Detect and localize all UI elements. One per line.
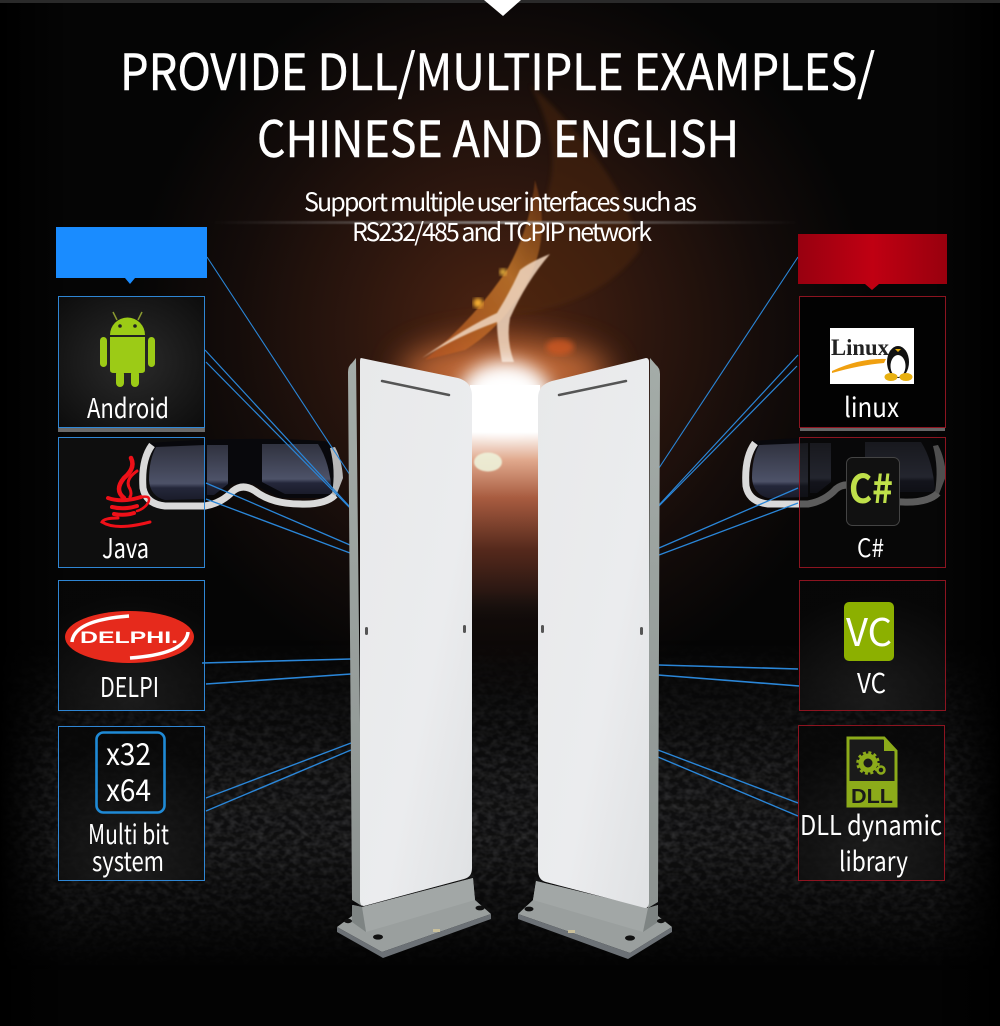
right gate <box>518 358 672 959</box>
icon: x32 x64 badge <box>96 730 164 812</box>
left gate indicators <box>365 625 466 635</box>
label: system <box>92 840 164 879</box>
label: Multi bit <box>88 813 169 852</box>
panel: DELPHI <box>58 580 204 710</box>
right gate slot <box>559 381 626 395</box>
label: C# <box>857 529 884 565</box>
panel: Android <box>58 296 204 428</box>
fire swoosh behind the gates <box>400 85 640 404</box>
icon: DLL file: DLL <box>851 786 893 808</box>
VR goggles right <box>746 437 946 504</box>
box backgrounds: left tiles <box>58 296 205 881</box>
left gate <box>337 358 491 958</box>
icon: C# tile: C# <box>849 457 893 515</box>
panel: Multi bit system <box>58 726 204 880</box>
subtitle <box>304 183 697 249</box>
panel: Java <box>58 438 204 568</box>
subtitle: Support multiple user interfaces such as <box>304 183 697 219</box>
title <box>120 33 875 172</box>
right gate side edge <box>648 358 660 908</box>
left gate white panel <box>360 358 472 906</box>
panel: linux <box>800 296 946 431</box>
label <box>800 804 942 879</box>
label <box>88 813 169 879</box>
label: DELPI <box>100 666 159 705</box>
label: VC <box>857 662 886 701</box>
panel: DLL dynamic library <box>798 726 944 880</box>
icon: linux logo: Linux <box>831 335 889 360</box>
icon: delphi logo <box>65 611 194 663</box>
right gate base <box>518 881 672 959</box>
icon: delphi logo: DELPHI. <box>80 628 178 647</box>
title: PROVIDE DLL/MULTIPLE EXAMPLES/ <box>120 33 875 105</box>
connector lines <box>202 257 799 816</box>
panel: VC <box>800 580 946 710</box>
left gate side edge <box>348 358 362 906</box>
icon: VC tile: VC <box>846 602 892 657</box>
subtitle: RS232/485 and TCPIP network <box>352 213 652 249</box>
icon: DLL file <box>847 738 897 808</box>
left gate slot <box>382 381 449 395</box>
light streak under subtitle <box>210 221 800 224</box>
label: DLL dynamic <box>800 804 942 843</box>
panel: C# <box>800 438 946 568</box>
VR goggles left <box>143 439 343 506</box>
label: Android <box>87 387 169 426</box>
icon: android robot <box>100 312 155 387</box>
icon: java cup <box>102 458 150 526</box>
label: library <box>839 840 908 879</box>
light column between gates <box>459 361 551 620</box>
red header block <box>798 234 947 290</box>
label: Java <box>102 527 149 566</box>
right gate white panel <box>538 358 649 908</box>
right gate indicators <box>541 625 643 635</box>
blue header block <box>56 227 207 284</box>
icon: x32 x64 badge: x64 <box>106 766 151 810</box>
icon: x32 x64 badge: x32 <box>106 730 151 774</box>
label: linux <box>844 386 899 425</box>
top notch arrow <box>484 0 521 16</box>
left gate base <box>337 878 491 958</box>
title: CHINESE AND ENGLISH <box>257 100 739 172</box>
icon: linux logo <box>830 328 914 384</box>
